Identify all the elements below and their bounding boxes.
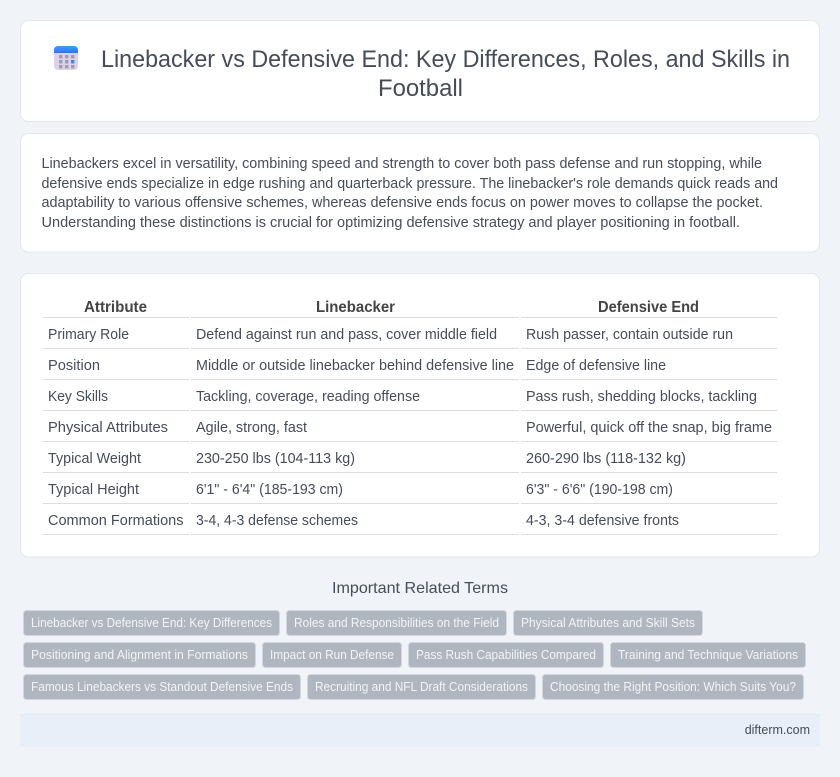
text block: intro paragraph: Linebackers excel in versatility, combining speed and strength to cover both pass defense and run stopping, while [42,156,762,172]
tag: Choosing the Right Position: Which Suits You? [550,679,796,694]
panel: comparison table [20,274,820,557]
title: Linebacker vs Defensive End: Key Differences, Roles, and Skills in [101,46,790,73]
table header row [84,299,699,316]
tag: Physical Attributes and Skill Sets [521,615,695,630]
tag list [24,610,806,700]
footer [20,713,820,747]
row: physical attributes [48,420,772,436]
tag [408,642,604,668]
tag: Positioning and Alignment in Formations [31,647,248,662]
row: typical weight: 230-250 lbs (104-113 kg) [196,451,355,467]
table header row: Attribute [84,299,147,316]
tag: Linebacker vs Defensive End: Key Differences [31,615,272,630]
row: common formations: Common Formations [48,513,184,529]
row: common formations: 4-3, 3-4 defensive fronts [526,513,679,529]
row: primary role: Primary Role [48,327,129,343]
tag: Pass Rush Capabilities Compared [416,647,596,662]
tag [24,642,256,668]
tag [610,642,806,668]
row: key skills: Tackling, coverage, reading offense [196,389,420,405]
row: typical height: 6'1" - 6'4" (185-193 cm) [196,482,343,498]
table header row: Defensive End [598,299,699,316]
row: position: Middle or outside linebacker behind defensive line [196,358,514,374]
row: key skills: Pass rush, shedding blocks, tackling [526,389,757,405]
row: typical height: 6'3" - 6'6" (190-198 cm) [526,482,673,498]
row: typical weight: 260-290 lbs (118-132 kg) [526,451,686,467]
tag [24,674,300,700]
panel: introduction [20,134,820,252]
row: position [48,358,666,374]
row: common formations: 3-4, 4-3 defense schemes [196,513,358,529]
panel: header [20,20,820,122]
text block: intro paragraph [42,156,778,231]
row: primary role: Defend against run and pass, cover middle field [196,327,497,343]
icon: calendar [54,46,78,70]
title: Football [378,75,463,102]
tag: Impact on Run Defense [270,647,394,662]
row: primary role [48,327,733,343]
row: key skills: Key Skills [48,389,108,405]
row: typical weight [48,451,686,467]
tag [514,610,702,636]
tag: Training and Technique Variations [618,647,798,662]
tag [286,610,506,636]
row: position: Edge of defensive line [526,358,666,374]
tag: Famous Linebackers vs Standout Defensive Ends [31,679,293,694]
row: position: Position [48,358,100,374]
tag: Recruiting and NFL Draft Considerations [315,679,528,694]
table rules [43,317,777,535]
text block: intro paragraph: Understanding these distinctions is crucial for optimizing defensive strategy and player positioning in football. [42,215,740,231]
footer brand: difterm.com [745,722,810,737]
text block: intro paragraph: defensive ends specialize in edge rushing and quarterback pressure. The linebacker's role demands quick reads and [42,176,778,192]
tag [24,610,280,636]
row: common formations [48,513,679,529]
title [101,46,790,102]
tag [262,642,402,668]
row: typical height: Typical Height [48,482,139,498]
row: physical attributes: Physical Attributes [48,420,168,436]
row: key skills [48,389,757,405]
tag: Roles and Responsibilities on the Field [294,615,499,630]
tag [308,674,536,700]
tag [542,674,804,700]
heading: important related terms: Important Related Terms [332,580,508,597]
text block: intro paragraph: adaptability to various offensive schemes, whereas defensive ends focus on power moves to collapse the pocket. [42,195,763,211]
row: primary role: Rush passer, contain outside run [526,327,733,343]
row: typical height [48,482,673,498]
row: physical attributes: Agile, strong, fast [196,420,307,436]
table header row: Linebacker [316,299,395,316]
row: physical attributes: Powerful, quick off the snap, big frame [526,420,772,436]
row: typical weight: Typical Weight [48,451,141,467]
